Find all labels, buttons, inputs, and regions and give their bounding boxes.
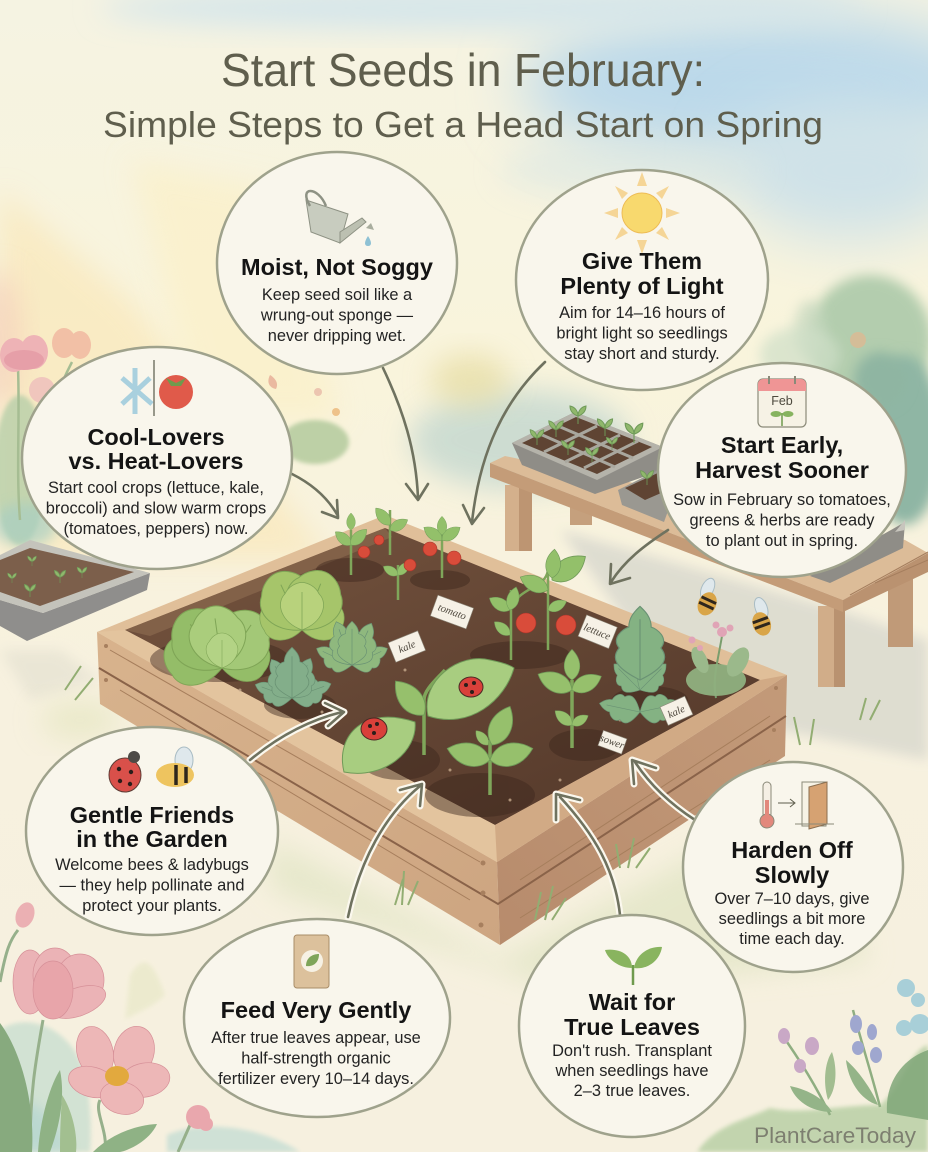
soil clumps	[150, 558, 688, 817]
plants: tomato seedlings	[332, 504, 591, 660]
heading: Slowly	[755, 862, 829, 888]
raised garden bed	[65, 515, 880, 945]
body text: when seedlings have	[554, 1062, 709, 1080]
ladybug on upper leaf	[459, 677, 483, 697]
body text: — they help pollinate and	[60, 876, 244, 894]
plants: lettuce and kale	[157, 561, 683, 726]
pink flower, upper	[13, 948, 110, 1025]
plant labels: tomato	[436, 602, 467, 623]
ladybug on leaf	[361, 718, 387, 740]
heading: in the Garden	[76, 826, 228, 852]
icon: sprout	[605, 947, 662, 985]
heading: Gentle Friends	[70, 802, 234, 828]
grass tufts	[65, 666, 880, 920]
panel: moist, not soggy	[217, 152, 457, 374]
heading: Cool-Lovers	[87, 424, 225, 450]
body text: greens & herbs are ready	[690, 512, 875, 530]
icon: snowflake and tomato	[122, 360, 193, 416]
arrow: start early to bed	[610, 530, 668, 584]
body text: never dripping wet.	[268, 327, 406, 345]
heading: True Leaves	[564, 1014, 700, 1040]
body text: Start cool crops (lettuce, kale,	[48, 479, 264, 497]
heading: Feed Very Gently	[221, 997, 411, 1023]
panel: give them plenty of light	[516, 170, 768, 390]
arrow: cool-lovers to bed	[292, 474, 338, 518]
body text: 2–3 true leaves.	[574, 1082, 690, 1100]
body text: fertilizer every 10–14 days.	[218, 1070, 414, 1088]
panel: harden off slowly	[683, 762, 903, 972]
arrow: feed to bed	[348, 784, 422, 917]
pink bud	[12, 900, 38, 930]
body text: broccoli) and slow warm crops	[46, 500, 266, 518]
title	[103, 44, 823, 145]
arrow: wait to bed	[556, 794, 620, 915]
body text: Keep seed soil like a	[262, 286, 413, 304]
bed nails	[104, 644, 778, 928]
icon: watering can	[306, 191, 374, 246]
icon: calendar: Feb	[771, 394, 793, 408]
body text: seedlings a bit more	[719, 910, 865, 928]
watermark: PlantCareToday	[754, 1123, 916, 1148]
heading: Start Early,	[721, 432, 843, 458]
panel: feed very gently	[184, 919, 450, 1117]
pink flower, lower	[65, 1022, 173, 1119]
bench with seed trays	[490, 406, 928, 687]
background flowers, left	[0, 328, 91, 547]
icon: fertilizer bag	[294, 935, 329, 988]
body text: bright light so seedlings	[556, 324, 728, 342]
arrow: gentle friends to bed	[250, 703, 344, 760]
arrow: harden to bed	[632, 760, 695, 820]
foreground flowers, lower left	[0, 900, 300, 1152]
arrow: light to bed	[463, 362, 545, 524]
heading: Harden Off	[731, 837, 853, 863]
plant labels: lettuce	[582, 622, 612, 643]
plants: large-leaf seedlings with ladybugs	[342, 649, 605, 795]
icon: sun	[604, 172, 680, 254]
icon: calendar	[758, 376, 806, 427]
body text: (tomatoes, peppers) now.	[64, 520, 248, 538]
body text: stay short and sturdy.	[564, 345, 720, 363]
body text: time each day.	[739, 930, 845, 948]
body text: Welcome bees & ladybugs	[55, 856, 249, 874]
heading: Give Them	[582, 248, 702, 274]
plant labels: kale	[666, 704, 687, 721]
panel: wait for true leaves	[519, 915, 745, 1137]
body text: Don't rush. Transplant	[552, 1042, 712, 1060]
panel: start early, harvest sooner	[658, 363, 906, 577]
arrow: moist to bed	[383, 368, 428, 500]
garden background, mid plants	[268, 375, 349, 464]
bees	[691, 576, 776, 638]
plants: flowering herb	[686, 622, 754, 698]
arrows	[250, 362, 695, 917]
body text: to plant out in spring.	[706, 532, 858, 550]
plant labels	[388, 595, 693, 754]
body text: half-strength organic	[241, 1050, 391, 1068]
body text: protect your plants.	[82, 897, 222, 915]
heading: Harvest Sooner	[695, 457, 869, 483]
icon: thermometer and door	[760, 782, 834, 829]
title: Start Seeds in February:	[221, 44, 705, 96]
body text: After true leaves appear, use	[211, 1029, 421, 1047]
tray: seedlings on bench	[512, 406, 905, 583]
heading: Wait for	[589, 989, 675, 1015]
plant labels: kale	[397, 639, 418, 656]
body text: Aim for 14–16 hours of	[559, 304, 725, 322]
seed tray, left	[0, 540, 150, 641]
heading: Moist, Not Soggy	[241, 254, 433, 280]
body text: Over 7–10 days, give	[715, 890, 869, 908]
body text: Sow in February so tomatoes,	[673, 491, 891, 509]
body text: wrung-out sponge —	[260, 306, 414, 324]
panel: gentle friends in the garden	[26, 727, 278, 935]
panel: cool-lovers vs heat-lovers	[22, 347, 292, 569]
plant labels: sower	[598, 733, 626, 752]
foreground foliage, lower right	[697, 979, 928, 1152]
icon: ladybug and bee	[109, 747, 194, 792]
title: Simple Steps to Get a Head Start on Spring	[103, 104, 823, 145]
background bushes, right	[760, 275, 928, 525]
heading: Plenty of Light	[560, 273, 724, 299]
heading: vs. Heat-Lovers	[68, 448, 244, 474]
